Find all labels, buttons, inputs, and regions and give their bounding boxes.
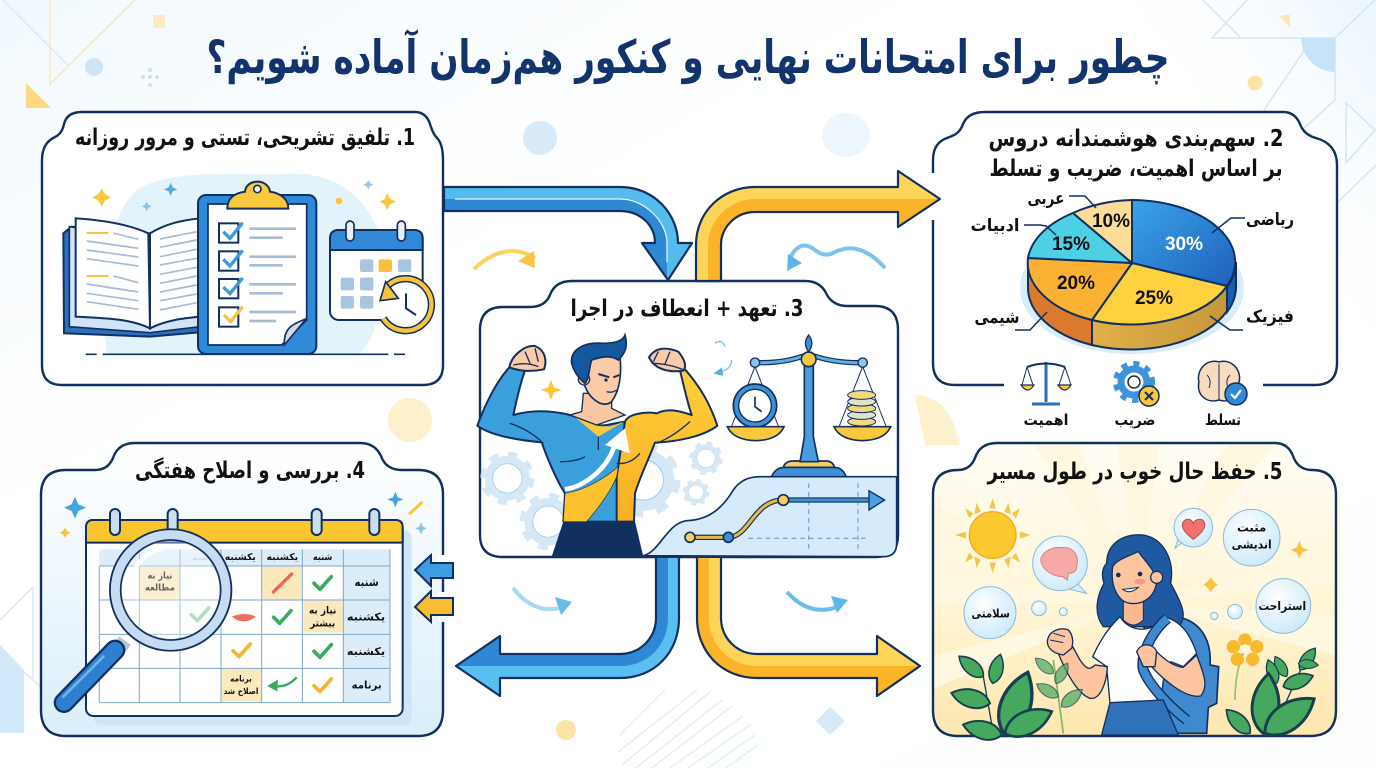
table marks [191,574,331,692]
icon: magnifying glass [63,535,226,703]
gears [483,443,721,547]
panel 3 illustration [477,335,897,557]
table headers and rows: شنبه [313,552,332,563]
arrow: panel 3 to panel 5 [697,558,920,696]
icon: calendar [330,221,435,335]
icon: open book [63,218,227,337]
arrow: panel 1 to panel 3 [444,187,692,280]
table headers and rows: یکشنبه [347,611,385,624]
panel 3: commitment and flexibility in execution [477,281,898,557]
arrows into panel 4 [415,555,453,622]
panel 5 heading: 5. حفظ حال خوب در طول مسیر [987,459,1282,485]
speech bubble: brain [1033,536,1087,593]
graph panel [643,477,897,557]
pie chart [970,189,1294,354]
panel 1: combining descriptive, tests, daily review [42,112,443,385]
pie chart: 25% [1135,288,1173,309]
table headers and rows: مطالعه [145,583,175,594]
table headers and rows: شنبه [192,553,207,562]
pie chart: فیزیک [1246,307,1294,327]
icon: clipboard checklist [198,182,316,354]
bubble: positive thinking: مثبت [1237,521,1266,535]
speech bubble: heart [1174,508,1213,548]
pie chart: شیمی [974,308,1020,328]
panel 5 illustration [949,498,1322,744]
panel 2 heading: بر اساس اهمیت، ضریب و تسلط [990,156,1282,182]
weekly calendar table [59,492,427,725]
label: coefficient: ضریب [1114,411,1156,429]
icon: strong man flexing [477,335,717,557]
panel 4: weekly review and correction [41,443,448,736]
label: importance: اهمیت [1024,411,1068,429]
arrow: panel 3 to panel 4 [456,558,679,696]
bubble: rest: استراحت [1258,599,1306,613]
panel 1 illustration [63,173,435,354]
decorative curved arrows [474,246,885,615]
table headers and rows: برنامه [230,673,252,684]
icon: brain, mastery [1198,361,1247,405]
pie chart: ادبیات [970,216,1020,236]
table headers and rows [145,552,385,697]
icon: balance scale with clock and spring [727,335,891,477]
label: mastery: تسلط [1205,411,1241,429]
panel 5: keeping well along the way [930,440,1340,744]
table headers and rows: نیاز به [309,605,336,616]
table headers and rows: برنامه [352,679,382,692]
bubble: rest [1256,579,1311,633]
icon: sparkles [59,492,427,538]
pie chart: 20% [1057,273,1095,294]
pie chart: ریاضی [1246,210,1294,230]
bubble: health: سلامتی [971,606,1010,620]
panel 2: smart weighting of subjects [928,112,1337,429]
arrow: panel 3 to panel 2 [696,171,940,281]
table headers and rows: شنبه [354,575,379,589]
table headers and rows: یکشنبه [266,552,298,563]
bubble: positive thinking: اندیشی [1232,537,1272,551]
icon: plants [949,645,1322,744]
panel 2 heading [988,126,1284,182]
table headers and rows: بیشتر [309,619,335,630]
pie chart: 15% [1052,234,1090,255]
icon: yellow flower [1227,633,1263,700]
panel 4 heading: 4. بررسی و اصلاح هفتگی [135,457,365,484]
panel 3 heading: 3. تعهد + انعطاف در اجرا [570,296,804,322]
panel 1 heading: 1. تلفیق تشریحی، تستی و مرور روزانه [75,125,415,151]
table headers and rows: یکشنبه [225,552,256,563]
bubble: positive thinking [1223,509,1280,566]
panel 2 heading: 2. سهم‌بندی هوشمندانه دروس [988,126,1284,152]
icon: gear, coefficient [1116,364,1159,406]
icon: student girl [1047,535,1219,735]
icon: sun [955,498,1031,573]
pie chart: 10% [1092,211,1130,232]
pie chart: 30% [1165,234,1203,255]
table headers and rows: اصلاح شد [223,686,259,697]
table headers and rows: نیاز به [147,570,172,581]
bubble: health [964,587,1016,639]
icon: sparkles [92,180,396,211]
pie chart: عربی [1028,189,1064,209]
icon: scale, importance [1021,362,1071,404]
table headers and rows: یکشنبه [347,645,385,658]
